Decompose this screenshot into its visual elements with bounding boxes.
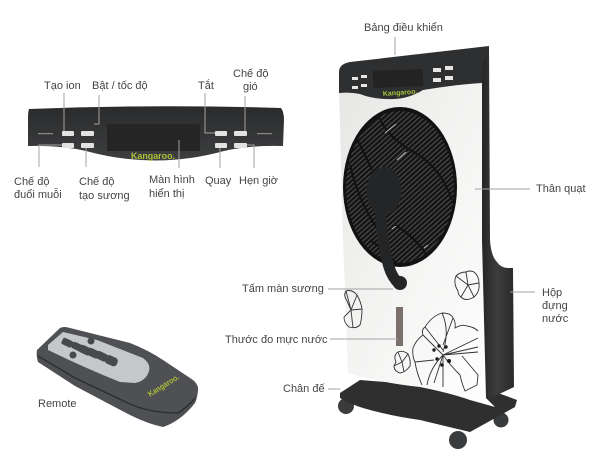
base	[340, 380, 517, 432]
flowers	[344, 271, 479, 391]
fan labels: nước	[542, 313, 569, 325]
control labels: tạo sương	[79, 190, 130, 202]
fan labels: Bảng điều khiển	[364, 22, 443, 34]
fan labels: Hộp	[542, 287, 562, 299]
logo: Kangaroo.	[131, 151, 175, 161]
control labels: Bật / tốc độ	[92, 80, 148, 92]
wheels	[338, 398, 508, 449]
fan labels: Tấm màn sương	[242, 283, 324, 295]
header	[339, 46, 489, 99]
water box and side strip	[480, 46, 514, 403]
control labels: Tắt	[198, 79, 214, 92]
control labels: Chế độ	[14, 176, 49, 188]
control labels: hiển thị	[149, 188, 184, 200]
control labels: đuổi muỗi	[14, 188, 62, 201]
control labels	[14, 68, 278, 202]
fan labels: Chân đế	[283, 383, 325, 395]
fan: Kangaroo.	[383, 89, 418, 98]
control labels: Chế độ	[79, 176, 114, 188]
panel leader lines	[39, 93, 254, 168]
control labels: gió	[243, 81, 258, 93]
remote label: Remote	[38, 398, 77, 410]
fan	[338, 46, 517, 449]
mist plate	[366, 167, 407, 290]
control labels: Hẹn giờ	[239, 175, 278, 187]
fan labels: đựng	[542, 300, 568, 312]
fan labels	[225, 22, 586, 395]
remote control	[37, 327, 198, 427]
water level gauge	[396, 307, 403, 346]
fan labels: Thước đo mực nước	[225, 334, 328, 346]
control labels: Tạo ion	[44, 80, 81, 92]
control labels: Màn hình	[149, 174, 195, 186]
control labels: Quay	[205, 175, 232, 187]
control labels: Chế độ	[233, 68, 268, 80]
fan body	[339, 80, 495, 407]
header buttons	[352, 66, 453, 89]
remote buttons	[61, 337, 119, 367]
control panel close-up	[28, 106, 284, 161]
fan leader lines	[328, 37, 535, 389]
fan labels: Thân quạt	[536, 183, 586, 195]
fan grille	[343, 107, 457, 267]
panel buttons	[62, 131, 247, 148]
remote control: Kangaroo.	[146, 373, 181, 399]
